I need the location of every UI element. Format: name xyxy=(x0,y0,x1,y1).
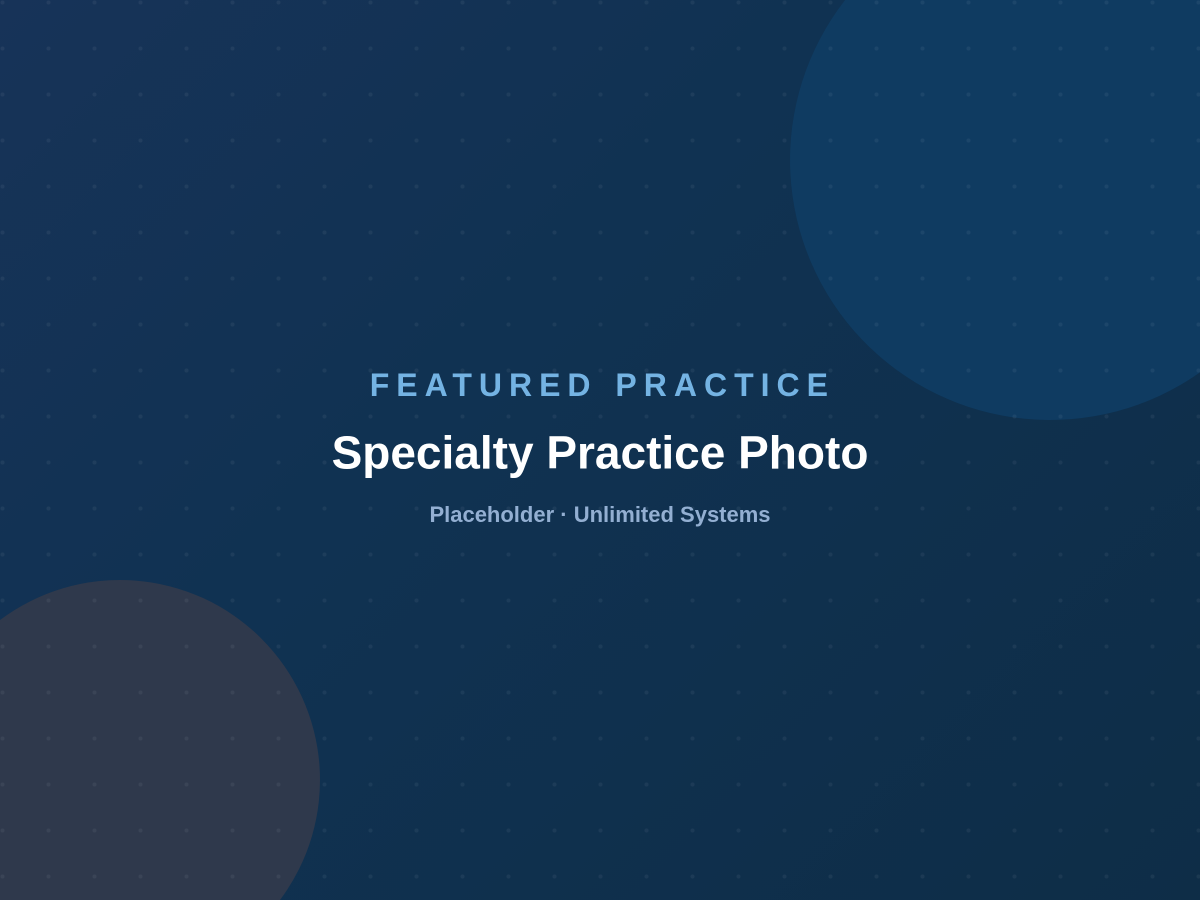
eyebrow label: FEATURED PRACTICE xyxy=(370,367,835,403)
subtitle: Placeholder · Unlimited Systems xyxy=(429,502,771,527)
title: Specialty Practice Photo xyxy=(332,426,868,478)
decorative circle: top right xyxy=(790,0,1200,420)
decorative circle: bottom left xyxy=(0,580,320,900)
